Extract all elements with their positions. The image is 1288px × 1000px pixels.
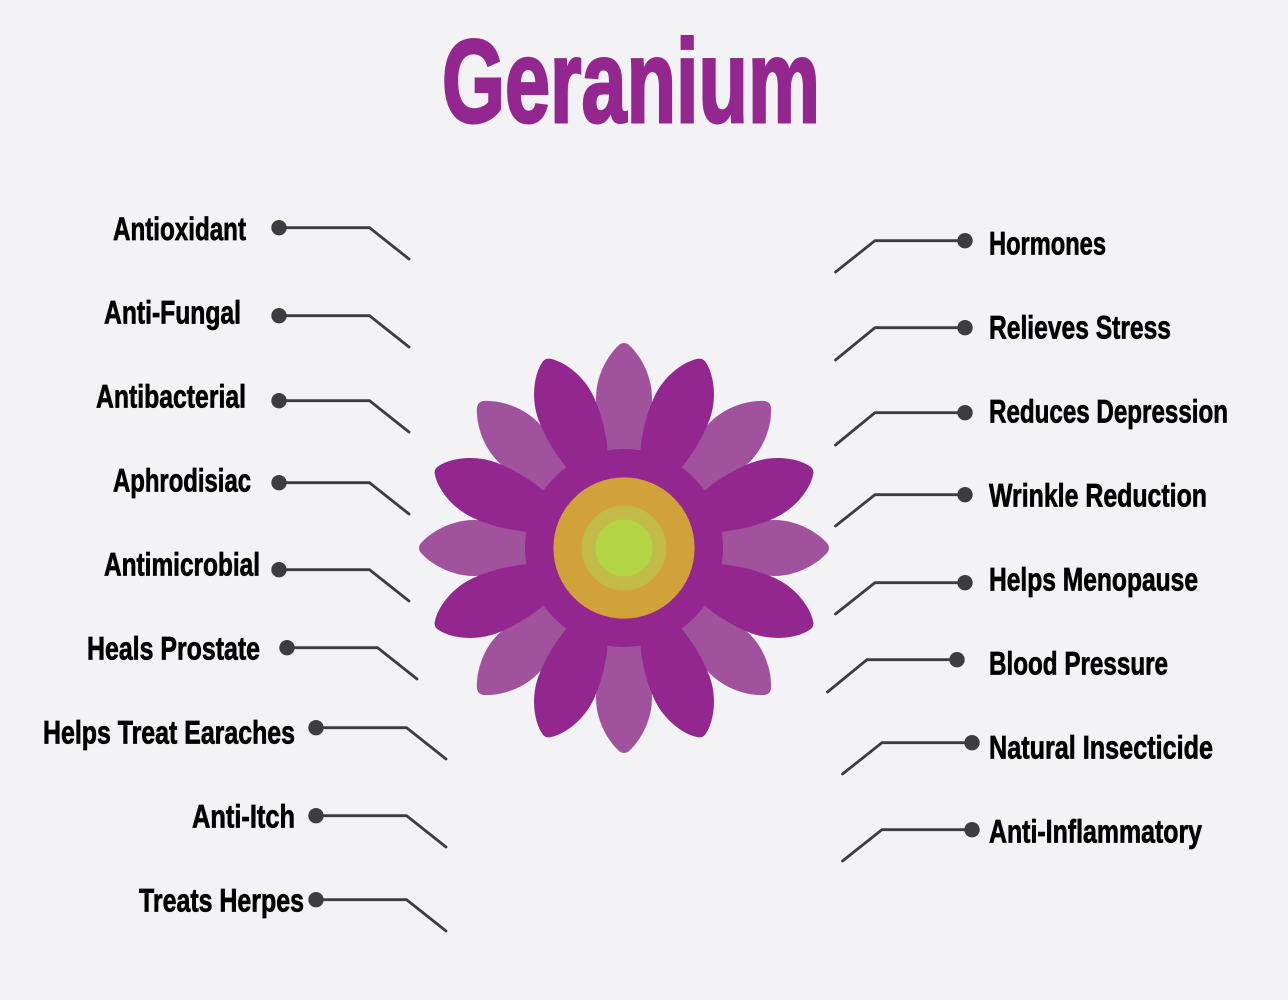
callout: Aphrodisiac xyxy=(113,462,409,514)
icon: geranium flower xyxy=(419,343,829,753)
callout: Wrinkle Reduction xyxy=(836,478,1207,526)
callout: Helps Menopause xyxy=(836,562,1198,614)
callout: Relieves Stress: Relieves Stress xyxy=(989,310,1171,346)
callout: Anti-Itch: Anti-Itch xyxy=(192,798,295,834)
callout: Blood Pressure: Blood Pressure xyxy=(989,646,1168,682)
callout: Antibacterial xyxy=(96,378,409,432)
callout: Hormones: Hormones xyxy=(989,226,1106,262)
callout: Reduces Depression xyxy=(836,394,1228,445)
callout: Natural Insecticide xyxy=(842,730,1213,774)
callout: Antimicrobial xyxy=(104,546,409,601)
callout: Blood Pressure xyxy=(828,646,1168,692)
callout: Antibacterial: Antibacterial xyxy=(96,378,246,414)
callout: Relieves Stress xyxy=(836,310,1171,360)
callout: Hormones xyxy=(836,226,1106,272)
callout: Anti-Inflammatory xyxy=(842,814,1202,861)
flower centre xyxy=(525,449,723,647)
callout: Antimicrobial: Antimicrobial xyxy=(104,546,260,582)
callout: Anti-Fungal xyxy=(104,294,409,347)
title: Geranium xyxy=(442,16,820,148)
callout: Helps Menopause: Helps Menopause xyxy=(989,562,1198,598)
callout: Wrinkle Reduction: Wrinkle Reduction xyxy=(989,478,1207,514)
callout: Treats Herpes: Treats Herpes xyxy=(139,882,304,918)
callout: Heals Prostate xyxy=(87,630,417,679)
callout: Antioxidant: Antioxidant xyxy=(113,211,246,247)
light outer petals xyxy=(419,343,829,753)
callout: Anti-Itch xyxy=(192,798,446,847)
callout: Helps Treat Earaches xyxy=(43,714,446,759)
callout: Antioxidant xyxy=(113,211,409,259)
callout: Anti-Inflammatory: Anti-Inflammatory xyxy=(989,814,1202,850)
dark petals xyxy=(424,348,824,748)
callout: Natural Insecticide: Natural Insecticide xyxy=(989,730,1213,766)
callout: Anti-Fungal: Anti-Fungal xyxy=(104,294,241,330)
callout: Aphrodisiac: Aphrodisiac xyxy=(113,462,251,498)
callout: Helps Treat Earaches: Helps Treat Earaches xyxy=(43,714,295,750)
callout: Heals Prostate: Heals Prostate xyxy=(87,630,260,666)
callout: Treats Herpes xyxy=(139,882,446,931)
